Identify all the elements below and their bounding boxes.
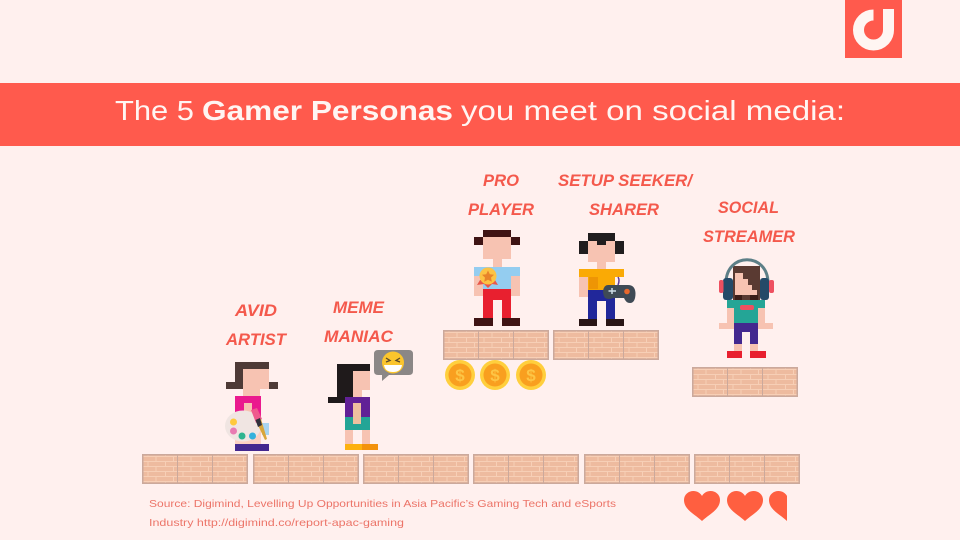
label: social streamer: STREAMER — [703, 228, 795, 246]
character: pro player — [474, 230, 520, 326]
icon: medal — [477, 268, 498, 288]
icon: emoji speech bubble — [374, 350, 413, 381]
label: avid artist: ARTIST — [225, 331, 288, 349]
logo — [845, 0, 902, 58]
icon: coins: $ — [490, 366, 500, 385]
label: avid artist: AVID — [234, 302, 277, 320]
platform: setup seeker bricks — [554, 331, 658, 359]
icon: headset — [719, 260, 774, 300]
icon: paint palette — [225, 408, 267, 442]
platform: pro player bricks — [444, 331, 548, 359]
icon: coins — [445, 360, 546, 390]
label: meme maniac: MANIAC — [324, 328, 394, 346]
label: meme maniac — [324, 299, 394, 346]
icon: coins: $ — [455, 366, 465, 385]
source text: Industry http://digimind.co/report-apac-gaming — [149, 517, 404, 529]
label: pro player — [468, 172, 534, 219]
icon: hearts — [684, 491, 787, 521]
title banner: The 5 — [115, 95, 194, 126]
character: meme maniac — [328, 350, 413, 450]
label: social streamer: SOCIAL — [718, 199, 779, 217]
icon: coins: $ — [526, 366, 536, 385]
source text — [149, 498, 616, 529]
title banner: Gamer Personas — [202, 95, 453, 126]
label: avid artist — [225, 302, 288, 349]
title banner: you meet on social media: — [461, 95, 845, 126]
icon: game controller — [603, 277, 636, 303]
label: pro player: PRO — [483, 172, 519, 190]
ground bricks — [143, 455, 799, 483]
platform: streamer bricks — [693, 368, 797, 396]
label: setup seeker/sharer — [558, 172, 694, 219]
source text: Source: Digimind, Levelling Up Opportunities in Asia Pacific’s Gaming Tech and eSports — [149, 498, 616, 510]
label: social streamer — [703, 199, 795, 246]
character: setup seeker — [579, 233, 636, 326]
character: social streamer — [719, 260, 774, 358]
character: avid artist — [225, 362, 278, 451]
label: pro player: PLAYER — [468, 201, 534, 219]
title banner — [0, 83, 960, 146]
label: setup seeker/sharer: SETUP SEEKER/ — [558, 172, 694, 190]
label: setup seeker/sharer: SHARER — [589, 201, 659, 219]
label: meme maniac: MEME — [333, 299, 385, 317]
